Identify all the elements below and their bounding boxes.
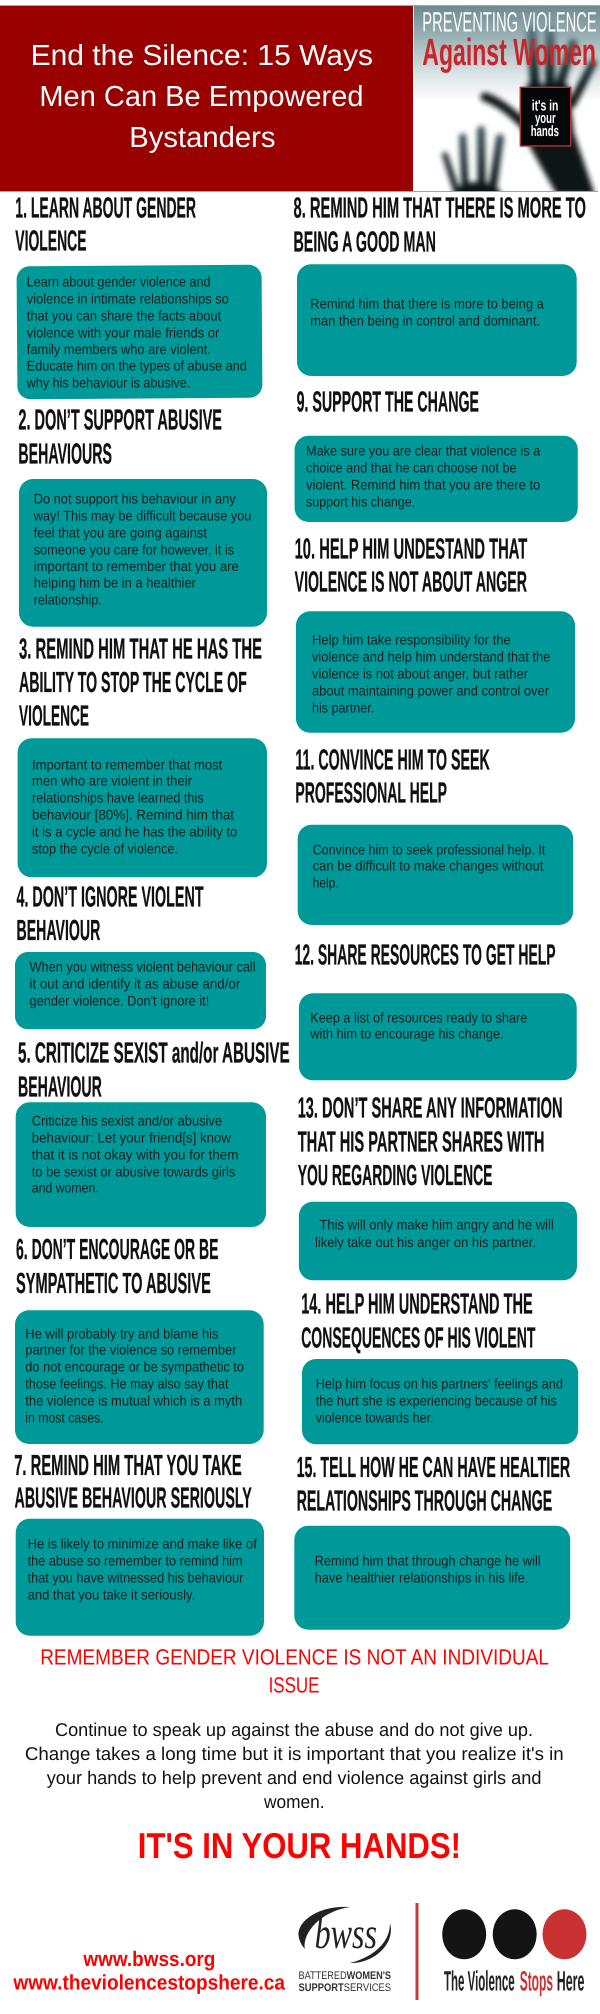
text box 15 [294,1526,570,1630]
text box 9: support his change. [306,494,415,510]
text box 4: it out and identify it as abuse and/or [30,976,241,992]
heading 6: SYMPATHETIC TO ABUSIVE [16,1268,211,1300]
heading 7: 7. REMIND HIM THAT YOU TAKE [14,1450,242,1482]
text box 1: Learn about gender violence and [27,274,210,290]
heading 15 [297,1452,570,1518]
text box 7: the abuse so remember to remind him [28,1553,243,1569]
text box 4 [15,952,266,1029]
step 7 [14,1450,264,1636]
text box 10 [296,611,575,733]
text box 8: man then being in control and dominant. [310,312,540,328]
text box 6: do not encourage or be sympathetic to [25,1359,244,1375]
heading 3: 3. REMIND HIM THAT HE HAS THE [19,633,262,665]
text box 7: and that you take it seriously. [28,1587,195,1603]
text box 2: someone you care for however, it is [34,542,234,558]
badge: it's in your hands [520,87,571,146]
heading 1 [15,192,196,258]
text box 11: help. [313,875,339,891]
title: Bystanders [129,122,276,154]
text box 2: way! This may be difficult because you [33,508,251,524]
text box 2: important to remember that you are [34,558,239,574]
logo divider [416,1903,418,2000]
title: End the Silence: 15 Ways [31,40,373,72]
text box 5: Criticize his sexist and/or abusive [32,1113,222,1129]
text box 6: the violence is mutual which is a myth [25,1393,242,1409]
badge: it's in your hands: your [535,110,556,127]
text box 7: that you have witnessed his behaviour [28,1570,244,1586]
text box 3: stop the cycle of violence. [32,841,178,857]
step 6: 6. DON’T ENCOURAGE OR BE [16,1234,218,1266]
text box 1: violence in intimate relationships so [27,291,229,307]
step 4: 4. DON’T IGNORE VIOLENT [16,882,204,914]
text box 1: that you can share the facts about [27,308,221,324]
heading 1: VIOLENCE [15,226,86,258]
text box 5: and women. [32,1180,99,1196]
heading 3: ABILITY TO STOP THE CYCLE OF [19,667,247,699]
step 14 [301,1288,578,1444]
step 1: 1. LEARN ABOUT GENDER [15,192,196,224]
heading 5: BEHAVIOUR [18,1071,102,1103]
step 10 [295,533,575,733]
text box 6 [15,1310,264,1444]
text box 10: violence and help him understand that the [312,648,550,664]
text box 9 [295,436,578,522]
website links [12,1948,285,1994]
heading 14 [301,1288,536,1354]
heading 5 [18,1037,290,1103]
text box 15: Remind him that through change he will [315,1553,541,1569]
text box 1: family members who are violent. [27,341,211,357]
text box 15: have healthier relationships in his life. [315,1570,528,1586]
heading 11: PROFESSIONAL HELP [295,778,447,810]
call to action: IT'S IN YOUR HANDS! [138,1825,461,1866]
step 9 [295,387,578,522]
text box 9: choice and that he can choose not be [306,460,517,476]
step 1 [15,192,262,399]
text box 13: likely take out his anger on his partner. [315,1234,536,1250]
text box 10: violence is not about anger, but rather [312,665,528,681]
text box 2: relationship. [34,592,102,608]
text box 1 [17,265,262,399]
text box 2: Do not support his behaviour in any [34,491,236,507]
text box 3: behaviour [80%]. Remind him that [32,807,234,823]
text box 5: behaviour: Let your friend[s] know [32,1130,232,1146]
step 5 [16,1037,290,1227]
text box 8 [297,264,577,376]
text box 5: to be sexist or abusive towards girls [32,1164,235,1180]
step 3 [18,633,267,877]
text box 11: can be difficult to make changes without [313,858,543,874]
heading 11 [295,744,490,810]
heading 4: BEHAVIOUR [16,915,100,947]
heading 8: BEING A GOOD MAN [294,227,436,259]
closing paragraph: your hands to help prevent and end violence against girls and [47,1767,541,1788]
text box 2: helping him be in a healthier [34,575,196,591]
text box 8: Remind him that there is more to being a [310,295,544,311]
text box 9: violent. Remind him that you are there to [306,477,540,493]
closing paragraph [25,1719,564,1812]
step 13 [298,1092,577,1280]
heading 3: VIOLENCE [19,700,89,732]
heading 13 [298,1092,562,1192]
text box 12 [299,993,577,1080]
text box 5 [16,1102,266,1227]
text box 7: He is likely to minimize and make like of [28,1536,257,1552]
text box 11: Convince him to seek professional help. It [313,842,545,858]
text box 13: This will only make him angry and he will [320,1217,554,1233]
title [31,40,373,154]
poster image: preventing violence against women [414,6,600,208]
heading 3 [19,633,262,732]
heading 10 [295,533,527,599]
badge: it's in your hands: hands [531,123,559,140]
text box 4: When you witness violent behaviour call [30,959,256,975]
text box 3: relationships have learned this [32,790,204,806]
closing paragraph: Continue to speak up against the abuse and do not give up. [55,1719,533,1740]
text box 10: his partner. [312,699,374,715]
website links: www.bwss.org [82,1948,215,1971]
step 8 [294,192,586,376]
text box 3 [18,738,267,877]
badge: it's in your hands: it's in [532,98,558,114]
red callout: not an individual issue: ISSUE [269,1673,320,1698]
logo: battered women's support services: BATTEREDWOMEN'S [298,1970,391,1982]
text box 14: the hurt she is experiencing because of his [316,1393,557,1409]
step 6 [15,1234,264,1444]
heading 2: BEHAVIOURS [18,438,112,470]
text box 4: gender violence. Don't ignore it! [30,993,209,1009]
heading 6 [16,1234,218,1300]
step 7: ABUSIVE BEHAVIOUR SERIOUSLY [14,1483,252,1515]
closing paragraph: Change takes a long time but it is important that you realize it's in [25,1743,564,1764]
logo: the violence stops here: Stops [520,1966,553,1997]
text box 6: partner for the violence so remember [25,1342,237,1358]
text box 5: that it is not okay with you for them [32,1147,238,1163]
text box 6: those feelings. He may also say that [25,1376,229,1392]
text box 9: Make sure you are clear that violence is a [306,443,540,459]
heading 8 [294,192,586,259]
text box 2: feel that you are going against [34,525,207,541]
text box 2 [19,479,267,627]
text box 1: violence with your male friends or [27,325,220,341]
heading 2 [18,404,222,470]
heading 2: 2. DON’T SUPPORT ABUSIVE [18,404,222,436]
header banner [0,5,600,208]
title: Men Can Be Empowered [39,81,364,113]
text box 1: Educate him on the types of abuse and [27,358,247,374]
red callout: not an individual issue [40,1645,549,1698]
heading 4 [16,882,204,947]
step 4 [15,882,266,1029]
text box 6: He will probably try and blame his [25,1326,218,1342]
text box 12: Keep a list of resources ready to share [310,1010,527,1026]
text box 7 [16,1519,264,1636]
step 11 [295,744,573,925]
logo: battered women's support services: bwss [315,1909,377,1958]
heading 5: 5. CRITICIZE SEXIST and/or ABUSIVE [18,1037,290,1069]
step 2 [18,404,267,627]
closing paragraph: women. [263,1791,324,1812]
website links: www.theviolencestopshere.ca [12,1971,285,1994]
logo: the violence stops here [442,1909,586,1997]
text box 3: men who are violent in their [32,773,192,789]
text box 3: Important to remember that most [32,757,222,773]
text box 6: in most cases. [25,1410,104,1426]
text box 12: with him to encourage his change. [309,1026,504,1042]
step 12 [295,939,577,1080]
heading 7 [14,1450,252,1515]
text box 3: it is a cycle and he has the ability to [32,824,237,840]
text box 10: Help him take responsibility for the [312,631,511,647]
text box 10: about maintaining power and control over [312,682,549,698]
logo: battered women's support services: SUPPORTSERVICES [298,1982,391,1994]
text box 14: violence towards her. [316,1410,434,1426]
text box 13 [299,1202,577,1280]
step 15 [294,1452,570,1630]
logo: battered women's support services [298,1907,391,1994]
text box 11 [298,825,573,925]
text box 14: Help him focus on his partners' feelings and [316,1376,563,1392]
text box 1: why his behaviour is abusive. [26,375,190,391]
text box 14 [302,1359,578,1444]
